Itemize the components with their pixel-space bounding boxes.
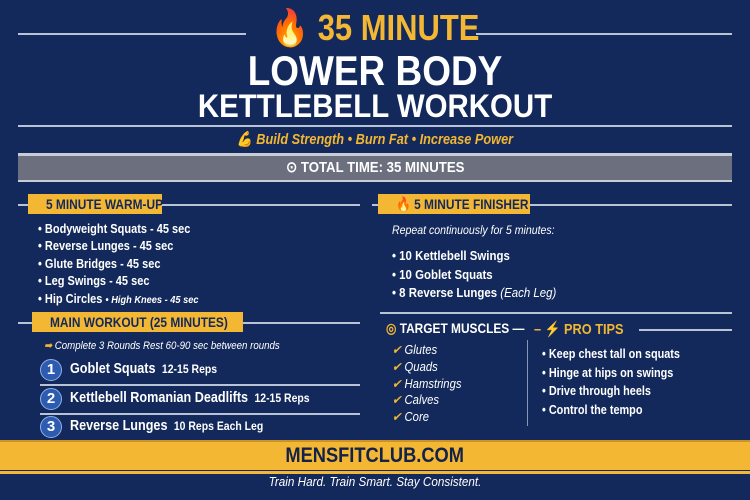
- finisher header: 🔥 5 MINUTE FINISHER: [396, 196, 529, 212]
- exercise 3: Reverse Lunges 10 Reps Each Leg: [70, 418, 263, 434]
- muscles list: ✔ Glutes: [392, 343, 437, 357]
- finisher list: • 10 Goblet Squats: [392, 266, 493, 282]
- subtitle: 💪 Build Strength • Burn Fat • Increase Power: [237, 131, 513, 148]
- title: [18, 7, 732, 124]
- pro tips header: – ⚡ PRO TIPS: [534, 321, 624, 338]
- exercise 1: Goblet Squats 12-15 Reps: [70, 361, 217, 377]
- warm-up list: • Glute Bridges - 45 sec: [38, 257, 160, 271]
- tips list: • Hinge at hips on swings: [542, 366, 673, 380]
- muscles list: ✔ Core: [392, 410, 429, 424]
- title line 3: KETTLEBELL WORKOUT: [198, 88, 552, 124]
- footer banner: MENSFITCLUB.COM: [286, 444, 464, 467]
- tips list: • Control the tempo: [542, 403, 642, 417]
- muscles list: ✔ Hamstrings: [392, 377, 461, 391]
- panel: main workout: [18, 312, 360, 438]
- exercise 1: 1: [47, 361, 55, 378]
- finisher list: • 10 Kettlebell Swings: [392, 248, 510, 263]
- finisher list: [392, 248, 556, 300]
- exercise 2: 2: [47, 390, 55, 407]
- tips list: • Drive through heels: [542, 384, 651, 398]
- panel: warm-up: [18, 194, 360, 306]
- main workout header: MAIN WORKOUT (25 MINUTES): [50, 314, 228, 330]
- rounds note: ➡ Complete 3 Rounds Rest 60-90 sec between rounds: [44, 340, 280, 352]
- warm-up list: [38, 222, 199, 306]
- muscles list: ✔ Quads: [392, 360, 438, 374]
- panel: target muscles: [386, 320, 524, 424]
- exercise 2: [40, 388, 310, 410]
- target muscles header: ◎ TARGET MUSCLES —: [386, 320, 524, 336]
- warm-up header: [28, 194, 162, 214]
- finisher list: • 8 Reverse Lunges (Each Leg): [392, 285, 556, 300]
- total time bar: ⊙ TOTAL TIME: 35 MINUTES: [286, 159, 464, 176]
- finisher intro: Repeat continuously for 5 minutes:: [392, 223, 555, 237]
- muscles list: [392, 343, 462, 424]
- warm-up list: • Leg Swings - 45 sec: [38, 274, 149, 288]
- finisher header: [378, 194, 530, 214]
- tips list: • Keep chest tall on squats: [542, 347, 680, 361]
- title line 2: LOWER BODY: [248, 47, 502, 94]
- exercise 3: 3: [47, 418, 55, 435]
- main workout header: [32, 312, 243, 332]
- warm-up header: 5 MINUTE WARM-UP: [46, 196, 163, 212]
- title line 1: 🔥 35 MINUTE: [271, 7, 479, 48]
- exercise 2: Kettlebell Romanian Deadlifts 12-15 Reps: [70, 390, 310, 406]
- warm-up list: • Reverse Lunges - 45 sec: [38, 239, 173, 253]
- warm-up list: • Bodyweight Squats - 45 sec: [38, 222, 190, 236]
- exercise 3: [40, 416, 263, 438]
- tips list: [542, 347, 680, 417]
- warm-up list: • Hip Circles • High Knees - 45 sec: [38, 292, 199, 306]
- tagline: Train Hard. Train Smart. Stay Consistent.: [269, 474, 481, 489]
- panel: pro tips: [534, 320, 732, 417]
- exercise 1: [40, 359, 217, 381]
- panel: finisher: [372, 194, 732, 300]
- total time bar: [18, 153, 732, 182]
- footer banner: [0, 440, 750, 470]
- muscles list: ✔ Calves: [392, 393, 439, 407]
